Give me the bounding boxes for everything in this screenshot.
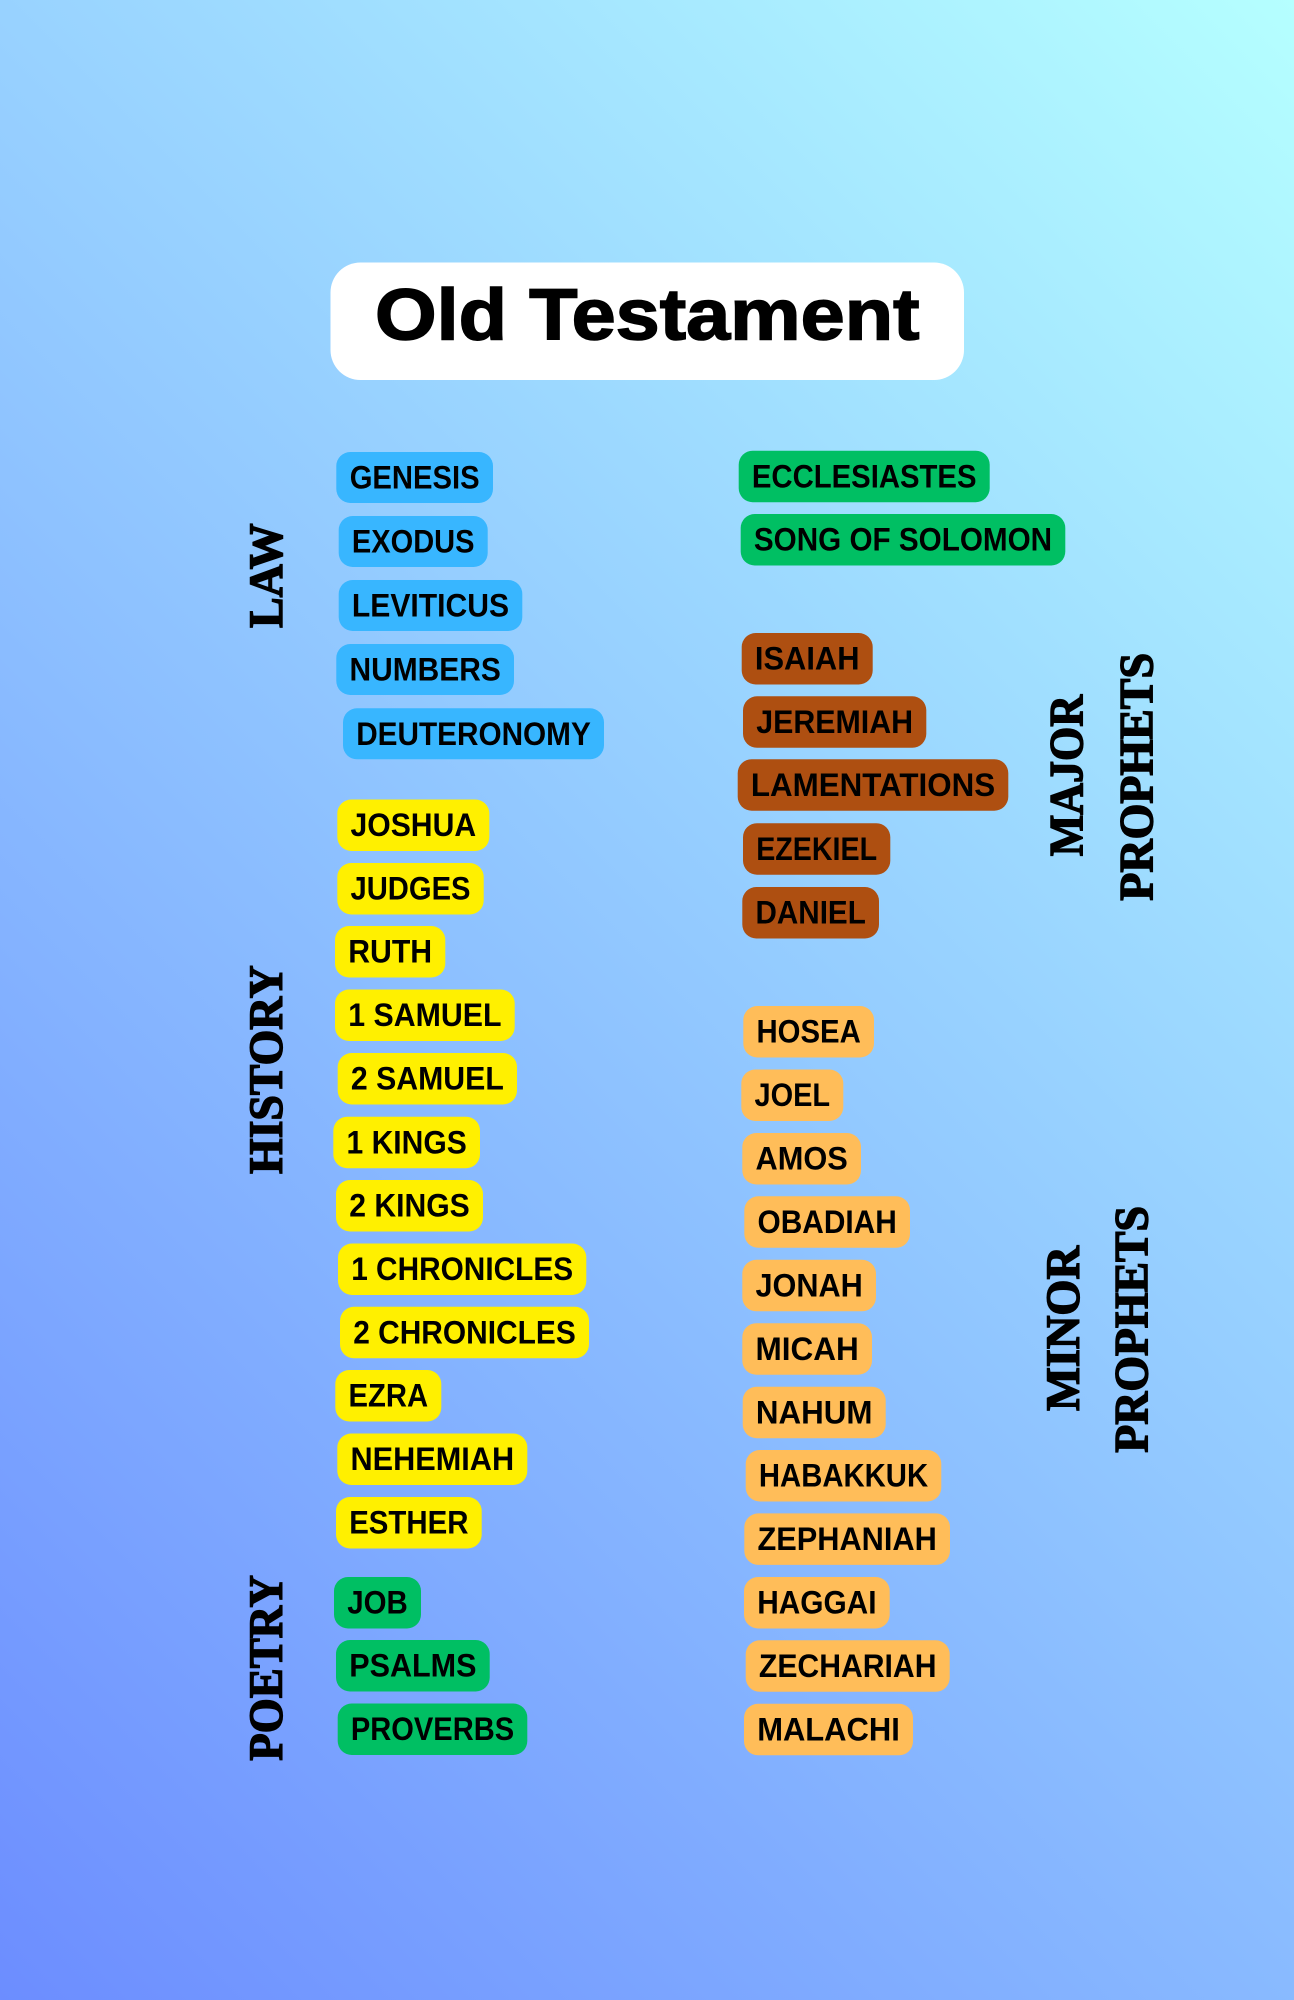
pill: LAMENTATIONS: [738, 759, 1008, 811]
pill: HAGGAI: [744, 1577, 890, 1628]
pill: JOB: [334, 1577, 421, 1628]
pill: NAHUM: [743, 1387, 886, 1438]
section label: POETRY: POETRY: [240, 1575, 293, 1761]
pill: ECCLESIASTES: [739, 451, 990, 502]
pill: 1 SAMUEL: 1 SAMUEL: [348, 997, 502, 1033]
section label: HISTORY: HISTORY: [240, 965, 293, 1174]
pill: JEREMIAH: JEREMIAH: [756, 704, 913, 740]
pill: RUTH: [335, 926, 445, 978]
section label: PROPHETS (minor): PROPHETS: [1105, 1206, 1158, 1453]
pill: JOSHUA: JOSHUA: [350, 807, 476, 843]
pill: EXODUS: EXODUS: [352, 524, 474, 560]
pill: DANIEL: [742, 887, 879, 938]
pill: LAMENTATIONS: LAMENTATIONS: [751, 767, 995, 803]
pill: EZEKIEL: [743, 823, 890, 875]
pill: EZRA: EZRA: [348, 1378, 428, 1414]
pill: HOSEA: HOSEA: [756, 1014, 861, 1050]
pill: 2 KINGS: [336, 1180, 483, 1232]
pill: NAHUM: NAHUM: [756, 1394, 872, 1430]
pill: RUTH: RUTH: [348, 934, 432, 970]
pill: ZEPHANIAH: ZEPHANIAH: [758, 1521, 937, 1557]
title panel: [330, 262, 964, 380]
pill: GENESIS: GENESIS: [350, 460, 480, 496]
section label: MAJOR: MAJOR: [1040, 694, 1093, 856]
pill: GENESIS: [336, 452, 493, 503]
pill: PROVERBS: [338, 1704, 527, 1755]
pill: ZECHARIAH: ZECHARIAH: [759, 1648, 936, 1684]
pill: SONG OF SOLOMON: SONG OF SOLOMON: [754, 522, 1052, 558]
section label: PROPHETS (major): PROPHETS: [1110, 653, 1163, 901]
pill: 1 KINGS: [333, 1117, 480, 1168]
pill: PSALMS: PSALMS: [349, 1648, 476, 1684]
pill: ESTHER: [336, 1497, 482, 1548]
pill: MICAH: MICAH: [756, 1331, 859, 1367]
pill: DANIEL: DANIEL: [756, 895, 866, 931]
pill: JONAH: [742, 1260, 876, 1311]
pill: HOSEA: [743, 1006, 874, 1058]
pill: LEVITICUS: [339, 580, 522, 631]
pill: ESTHER: ESTHER: [349, 1505, 468, 1541]
history books: [333, 800, 589, 1548]
pill: AMOS: AMOS: [756, 1141, 848, 1177]
pill: DEUTERONOMY: DEUTERONOMY: [356, 716, 591, 752]
pill: PSALMS: [336, 1640, 490, 1692]
pill: DEUTERONOMY: [343, 708, 604, 759]
pill: 1 SAMUEL: [335, 990, 515, 1041]
major prophets books: [738, 633, 1008, 938]
pill: OBADIAH: [744, 1196, 910, 1248]
pill: 2 CHRONICLES: [340, 1307, 589, 1358]
law books: [336, 452, 604, 759]
pill: JUDGES: [337, 863, 484, 914]
pill: EZEKIEL: EZEKIEL: [756, 831, 877, 867]
pill: NEHEMIAH: [337, 1434, 527, 1485]
pill: 1 CHRONICLES: [338, 1244, 586, 1295]
pill: ISAIAH: [742, 633, 873, 684]
pill: ECCLESIASTES: ECCLESIASTES: [752, 458, 976, 494]
pill: JONAH: JONAH: [756, 1267, 863, 1303]
pill: PROVERBS: PROVERBS: [351, 1711, 514, 1747]
pill: 2 CHRONICLES: 2 CHRONICLES: [353, 1314, 576, 1350]
pill: JEREMIAH: [743, 696, 926, 748]
pill: 1 KINGS: 1 KINGS: [346, 1124, 467, 1160]
pill: JOEL: [741, 1070, 843, 1121]
section label: MINOR: MINOR: [1037, 1245, 1090, 1411]
pill: NUMBERS: [336, 644, 514, 695]
pill: AMOS: [742, 1133, 861, 1184]
poetry books: [334, 451, 1065, 1755]
pill: JOB: JOB: [347, 1585, 408, 1621]
section label: LAW: LAW: [240, 523, 293, 628]
pill: EZRA: [335, 1370, 441, 1422]
pill: EXODUS: [339, 516, 488, 567]
pill: MALACHI: [744, 1704, 913, 1755]
pill: MICAH: [742, 1323, 872, 1375]
pill: MALACHI: MALACHI: [757, 1711, 900, 1747]
pill: HABAKKUK: HABAKKUK: [759, 1458, 928, 1494]
pill: NUMBERS: NUMBERS: [350, 652, 501, 688]
pill: 2 SAMUEL: 2 SAMUEL: [351, 1061, 504, 1097]
pill: HAGGAI: HAGGAI: [757, 1585, 876, 1621]
pill: ZEPHANIAH: [744, 1513, 950, 1565]
pill: NEHEMIAH: NEHEMIAH: [350, 1441, 514, 1477]
pill: LEVITICUS: LEVITICUS: [352, 588, 509, 624]
pill: 2 KINGS: 2 KINGS: [349, 1188, 470, 1224]
pill: ZECHARIAH: [746, 1640, 950, 1692]
title: Old Testament: [375, 276, 920, 356]
pill: 1 CHRONICLES: 1 CHRONICLES: [351, 1251, 573, 1287]
pill: JOEL: JOEL: [754, 1077, 830, 1113]
pill: OBADIAH: OBADIAH: [758, 1204, 897, 1240]
minor prophets books: [741, 1006, 950, 1755]
pill: ISAIAH: ISAIAH: [755, 641, 860, 677]
pill: SONG OF SOLOMON: [741, 514, 1065, 566]
pill: JUDGES: JUDGES: [350, 871, 470, 907]
pill: JOSHUA: [337, 800, 489, 851]
pill: HABAKKUK: [746, 1450, 941, 1502]
pill: 2 SAMUEL: [338, 1053, 517, 1104]
